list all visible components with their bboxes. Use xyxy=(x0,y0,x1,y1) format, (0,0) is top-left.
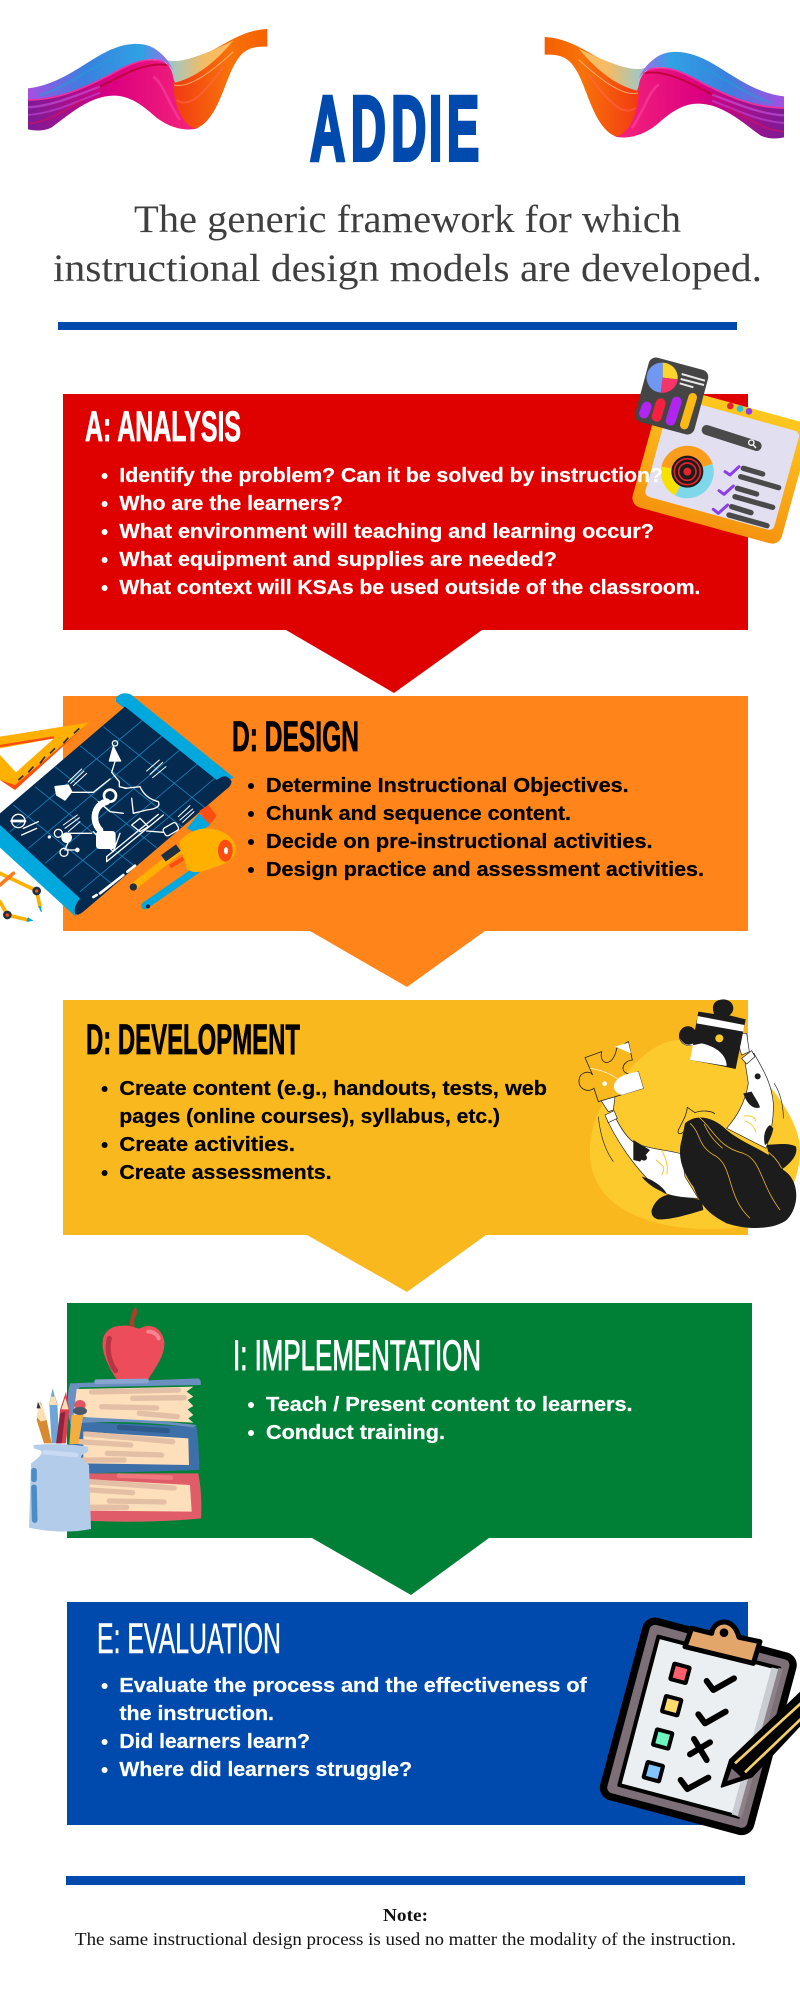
bullet list: design: Chunk and sequence content. xyxy=(266,803,571,825)
panel: evaluation xyxy=(67,1602,800,1834)
green banner with arrow xyxy=(67,1303,752,1595)
bullet list: evaluation: the instruction. xyxy=(119,1703,274,1725)
bullet list: analysis: Who are the learners? xyxy=(119,493,343,515)
bullet list: development: Create content (e.g., handouts, tests, web xyxy=(119,1078,547,1100)
yellow banner with arrow xyxy=(63,1000,748,1292)
subtitle xyxy=(53,198,762,290)
icon: clipboard checklist xyxy=(601,1619,800,1834)
bullet list: analysis xyxy=(102,465,700,599)
icon: dashboard window xyxy=(630,356,800,546)
bullet list: implementation xyxy=(248,1394,633,1444)
bullet list: implementation: Conduct training. xyxy=(266,1422,445,1444)
decorative ribbon left xyxy=(28,29,267,130)
top divider xyxy=(58,322,737,330)
panel: implementation xyxy=(29,1303,752,1595)
icon: person holding puzzle pieces xyxy=(579,999,800,1229)
note: Note: xyxy=(383,1905,428,1925)
bullet list: analysis: Identify the problem? Can it be solved by instruction? xyxy=(119,465,663,487)
red banner with arrow xyxy=(63,394,748,693)
bullet list: evaluation: Where did learners struggle? xyxy=(119,1759,412,1781)
icon: blueprint and drafting tools xyxy=(0,693,236,922)
bullet list: design: Decide on pre-instructional activities. xyxy=(266,831,653,853)
bullet list: design xyxy=(248,775,704,881)
note xyxy=(75,1905,736,1949)
subtitle: The generic framework for which xyxy=(134,198,681,241)
bullet list: evaluation: Did learners learn? xyxy=(119,1731,310,1753)
bullet list: implementation: Teach / Present content to learners. xyxy=(266,1394,633,1416)
heading: implementation: I: IMPLEMENTATION xyxy=(233,1332,481,1380)
panel: design xyxy=(0,693,748,987)
bullet list: analysis: What environment will teaching and learning occur? xyxy=(119,521,654,543)
bullet list: development: Create assessments. xyxy=(119,1162,332,1184)
heading: development: D: DEVELOPMENT xyxy=(86,1016,300,1064)
bullet list: design: Determine Instructional Objectives. xyxy=(266,775,629,797)
orange banner with arrow xyxy=(63,696,748,987)
subtitle: instructional design models are developed. xyxy=(53,247,762,290)
blue banner xyxy=(67,1602,748,1825)
bullet list: development xyxy=(102,1078,547,1184)
bullet list: development: pages (online courses), syllabus, etc.) xyxy=(119,1106,500,1128)
heading: design: D: DESIGN xyxy=(232,713,359,761)
icon: apple, books and pencil jar xyxy=(29,1307,201,1532)
heading: analysis: A: ANALYSIS xyxy=(85,403,241,451)
heading: evaluation: E: EVALUATION xyxy=(97,1615,281,1663)
bullet list: design: Design practice and assessment activities. xyxy=(266,859,704,881)
bottom divider xyxy=(66,1876,745,1885)
bullet list: analysis: What context will KSAs be used outside of the classroom. xyxy=(119,577,700,599)
bullet list: development: Create activities. xyxy=(119,1134,295,1156)
note: The same instructional design process is used no matter the modality of the instruction. xyxy=(75,1929,736,1949)
bullet list: analysis: What equipment and supplies are needed? xyxy=(119,549,557,571)
bullet list: evaluation: Evaluate the process and the effectiveness of xyxy=(119,1675,587,1697)
panel: development xyxy=(63,999,800,1292)
title: ADDIE xyxy=(310,76,479,180)
panel: analysis xyxy=(63,356,800,693)
bullet list: evaluation xyxy=(102,1675,587,1781)
decorative ribbon right xyxy=(545,37,784,138)
